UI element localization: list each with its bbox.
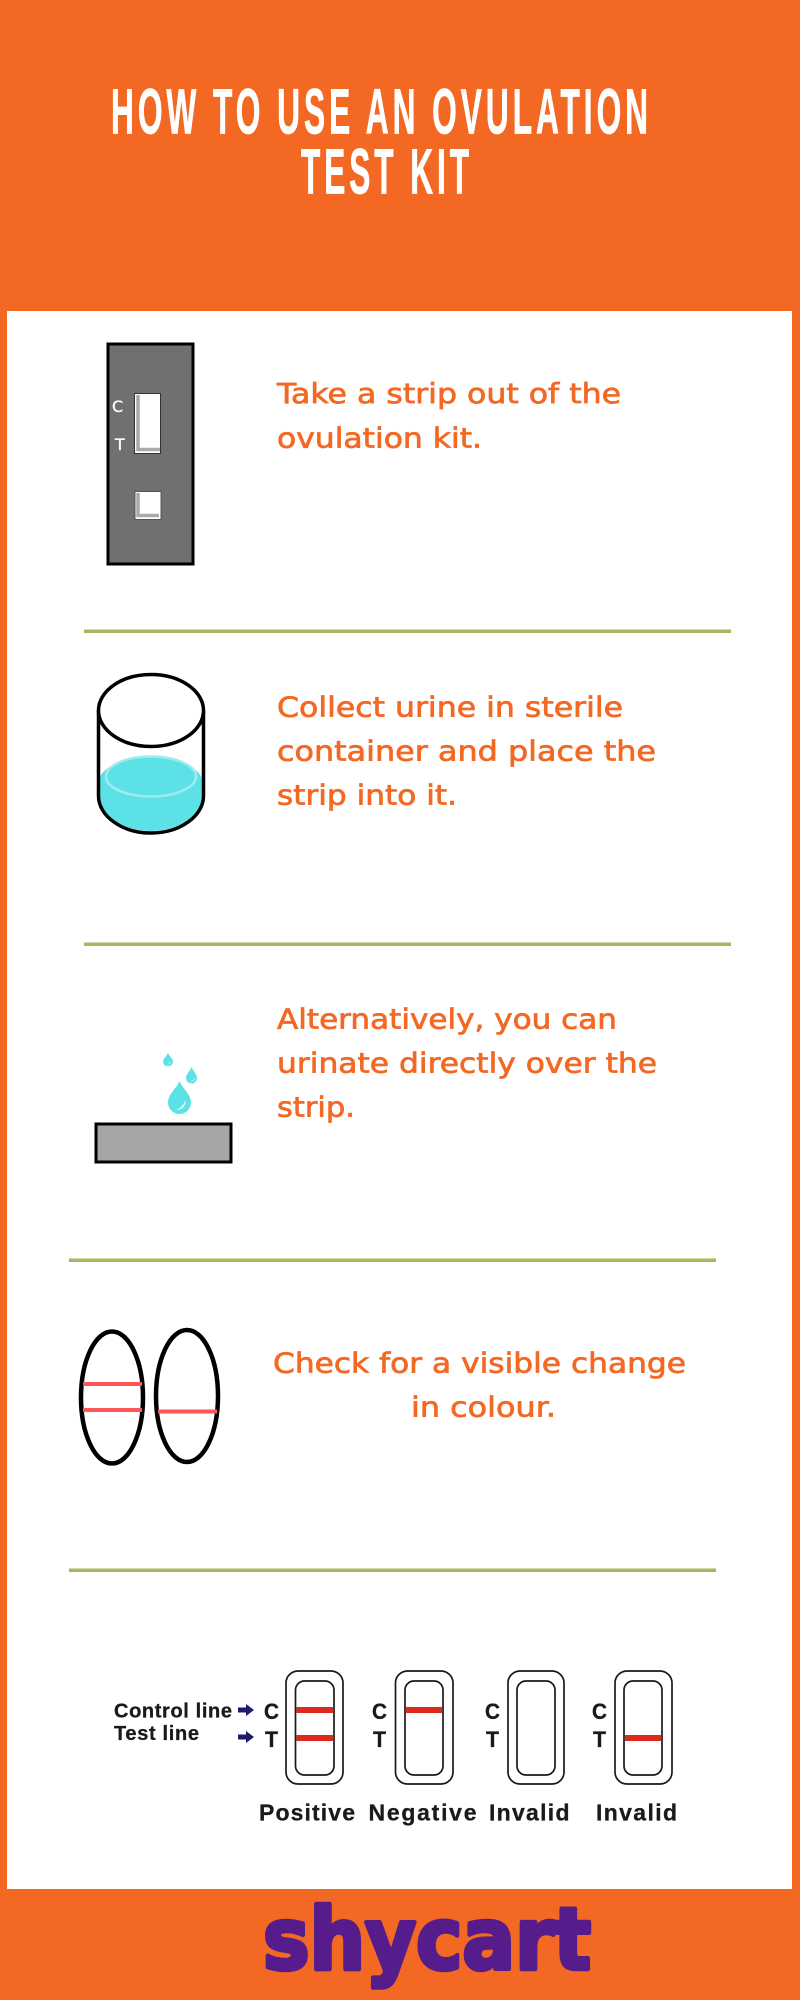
positive card: T [265,1727,279,1752]
invalid card no lines: T [486,1727,500,1752]
invalid card test line only: T [593,1727,607,1752]
icon: test strip [108,344,193,564]
invalid card test line only: Invalid [596,1800,677,1826]
icon: test strip: C [112,397,123,416]
step 1 text: ovulation kit. [277,422,482,454]
title: TEST KIT [301,136,473,208]
title [111,76,652,208]
step 1 text: Take a strip out of the [276,377,621,410]
step 3 text: Alternatively, you can [277,1002,617,1036]
step 2 text: strip into it. [277,778,457,812]
step 1 text [276,377,621,454]
invalid card test line only: C [592,1699,607,1724]
divider 1 [84,630,731,633]
divider 4 [69,1568,716,1572]
positive card: Positive [259,1800,355,1826]
icon: two ovals with colour lines [81,1330,218,1464]
icon: test strip: T [114,435,125,454]
negative card: C [372,1699,387,1724]
step 3 text [277,1002,657,1124]
results chart [114,1671,677,1826]
negative card [368,1671,476,1826]
negative card: Negative [368,1800,476,1826]
step 2 text [277,690,656,812]
logo: shycart [263,1890,591,1990]
line labels: Test line [114,1723,199,1745]
step 2 text: Collect urine in sterile [277,690,623,724]
invalid card test line only [592,1671,677,1826]
white content panel [7,311,792,1889]
step 4 text [273,1346,686,1424]
icon: water drops [163,1052,197,1114]
negative card: T [373,1727,387,1752]
step 4 text: Check for a visible change [273,1346,686,1380]
divider 2 [84,942,731,946]
positive card [259,1671,355,1826]
divider 3 [69,1258,716,1262]
positive card: C [264,1699,279,1724]
arrows [238,1704,254,1743]
step 4 text: in colour. [411,1390,556,1424]
icon: urine container [98,674,204,833]
line labels: Control line [114,1700,232,1722]
icon: strip side view [96,1124,231,1162]
invalid card no lines [485,1671,570,1826]
step 3 text: strip. [277,1090,355,1124]
invalid card no lines: C [485,1699,500,1724]
line labels [114,1700,232,1745]
step 3 text: urinate directly over the [277,1046,657,1080]
step 2 text: container and place the [277,734,656,768]
invalid card no lines: Invalid [489,1800,570,1826]
